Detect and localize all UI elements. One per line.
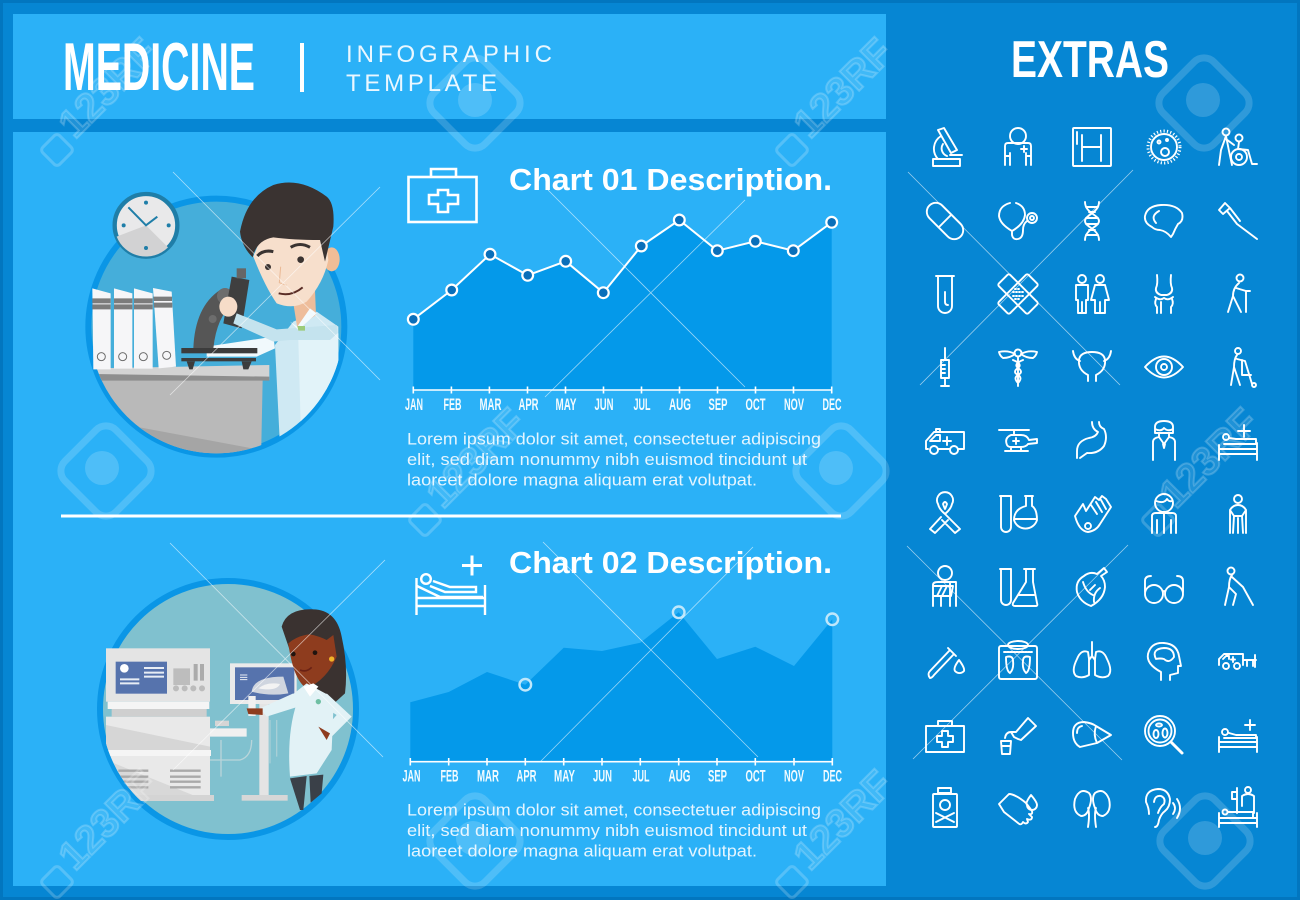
icon: bed with plus [1219, 425, 1257, 460]
icon: test tube [936, 276, 954, 313]
chart 02: month labels: SEP [708, 768, 727, 786]
icon: hospital sign [1073, 128, 1111, 166]
chart 01: month labels: DEC [822, 396, 842, 414]
icon: helicopter [999, 430, 1037, 451]
icon: first aid kit [408, 169, 476, 222]
chart 01: month labels: JUN [594, 396, 614, 414]
chart 01: month labels: MAY [556, 396, 576, 414]
text block: chart 02 description: elit, sed diam nonummy nibh euismod tincidunt ut [407, 821, 807, 840]
illustration: doctor with ultrasound machine [100, 581, 356, 837]
chart 02: month labels: APR [516, 768, 537, 786]
icon: female nurse [1153, 421, 1175, 460]
icon: syringe [941, 348, 949, 386]
icon: tube and conical flask [1000, 569, 1037, 606]
icon: bandage [997, 273, 1039, 315]
chart 02: month labels: MAY [554, 768, 575, 786]
chart 01: month labels: APR [518, 396, 539, 414]
icon: tube and round flask [1000, 496, 1037, 532]
text block: chart 01 description: Lorem ipsum dolor sit amet, consectetuer adipiscing [407, 430, 821, 448]
icon: wheelchair [1219, 128, 1257, 165]
icon: bladder [1073, 351, 1111, 381]
icon: crutch [1219, 203, 1257, 239]
chart 01: month labels: JAN [405, 396, 423, 414]
chart 02: month labels: MAR [477, 768, 499, 786]
chart 02: month labels: JUN [593, 768, 612, 786]
watermark: stock photo logos: 123RF [785, 762, 901, 878]
icon: hand washing [999, 794, 1037, 824]
subtitle: TEMPLATE [346, 70, 497, 97]
icon: doctor [1005, 128, 1031, 165]
icon: blood test tube [928, 648, 964, 678]
icon: stomach [1077, 422, 1106, 458]
watermark: stock photo logos: 123RF [785, 30, 901, 146]
icon: bacterium [1148, 131, 1180, 163]
icon: man with tie [1152, 494, 1176, 533]
text block: chart 02 description [407, 800, 821, 860]
icon: liver [1073, 722, 1111, 747]
chart 01: month labels: JUL [634, 396, 650, 414]
icon: person with walker [1231, 348, 1256, 387]
icon: pill [923, 199, 967, 243]
text block: chart 01 description: elit, sed diam nonummy nibh euismod tincidunt ut [407, 450, 807, 469]
icon: elderly person [1228, 274, 1250, 312]
chart 01: month labels: SEP [708, 396, 728, 414]
heading: extras: EXTRAS [1011, 31, 1169, 89]
panel: charts body [13, 132, 886, 886]
icon: glasses [1145, 576, 1183, 603]
icon: stethoscope [999, 203, 1037, 239]
icon: kidneys [1074, 791, 1110, 827]
icon: ribbon [930, 492, 960, 533]
icon: patient bed [1219, 720, 1257, 752]
icon: ambulance with stretcher [1219, 654, 1256, 669]
panel: extras icon grid [923, 128, 1257, 827]
icon: magnifier with bacteria [1145, 716, 1182, 753]
chart 01: month labels [405, 396, 842, 414]
chart 02: month labels: JUL [632, 768, 650, 786]
icon: brain [1145, 205, 1182, 237]
chart 01: month labels: MAR [480, 396, 502, 414]
text block: chart 01 description: laoreet dolore magna aliquam erat volutpat. [407, 470, 757, 490]
heading: chart 02: Chart 02 Description. [509, 545, 832, 580]
chart 01: month labels: FEB [444, 396, 462, 414]
watermark: stock photo logos: 123RF [418, 400, 534, 516]
icon: medical kit [926, 721, 964, 752]
icon: knee joint [1155, 275, 1173, 313]
chart 02: month labels: FEB [440, 768, 459, 786]
watermark: stock photo logos: 123RF [1151, 400, 1267, 516]
illustration: scientist at microscope [88, 183, 344, 460]
icon: patient in bed [416, 556, 485, 615]
icon: dna [1085, 202, 1099, 240]
icon: medicine bottle and cup [1001, 718, 1036, 754]
chart 02: month labels: AUG [668, 768, 690, 786]
text block: chart 02 description: laoreet dolore magna aliquam erat volutpat. [407, 842, 757, 860]
chart 02: area [410, 606, 838, 766]
icon: hospital bed with doctor [1219, 787, 1257, 827]
chart 02: month labels [402, 768, 842, 786]
chart 02: month labels: JAN [402, 768, 420, 786]
icon: lungs [1074, 642, 1110, 677]
chart 02: month labels: OCT [746, 768, 766, 786]
icon: ambulance [926, 429, 964, 454]
icon: man and woman [1076, 275, 1109, 313]
icon: microscope [933, 128, 962, 166]
icon: person with cane [1225, 568, 1253, 605]
panel: header [13, 14, 886, 119]
chart 01: line and area [408, 215, 837, 394]
title: medicine: MEDICINE [63, 29, 255, 105]
icon: head with brain [1148, 643, 1181, 680]
watermark: stock photo logos: 123RF [50, 30, 166, 146]
chart 01: month labels: AUG [669, 396, 691, 414]
icon: caduceus [999, 350, 1037, 386]
icon: ear with sound waves [1146, 789, 1180, 827]
subtitle [346, 41, 552, 97]
icon: hand with drop [1075, 496, 1111, 532]
icon: weighing scale [999, 641, 1037, 679]
chart 02: month labels: NOV [784, 768, 804, 786]
heading: chart 01: Chart 01 Description. [509, 162, 832, 197]
watermark: stock photo logos: 123RF [50, 762, 166, 878]
subtitle: INFOGRAPHIC [346, 41, 552, 68]
icon: person on crutches [1230, 495, 1246, 533]
text block: chart 01 description [407, 430, 821, 490]
chart 01: month labels: OCT [746, 396, 766, 414]
chart 01: month labels: NOV [784, 396, 804, 414]
icon: poison bottle [933, 788, 957, 827]
chart 02: month labels: DEC [823, 768, 842, 786]
icon: arm in sling [933, 566, 956, 606]
icon: eye [1145, 356, 1183, 378]
title separator [300, 43, 304, 92]
text block: chart 02 description: Lorem ipsum dolor sit amet, consectetuer adipiscing [407, 800, 821, 820]
icon: anatomical heart [1077, 568, 1107, 606]
